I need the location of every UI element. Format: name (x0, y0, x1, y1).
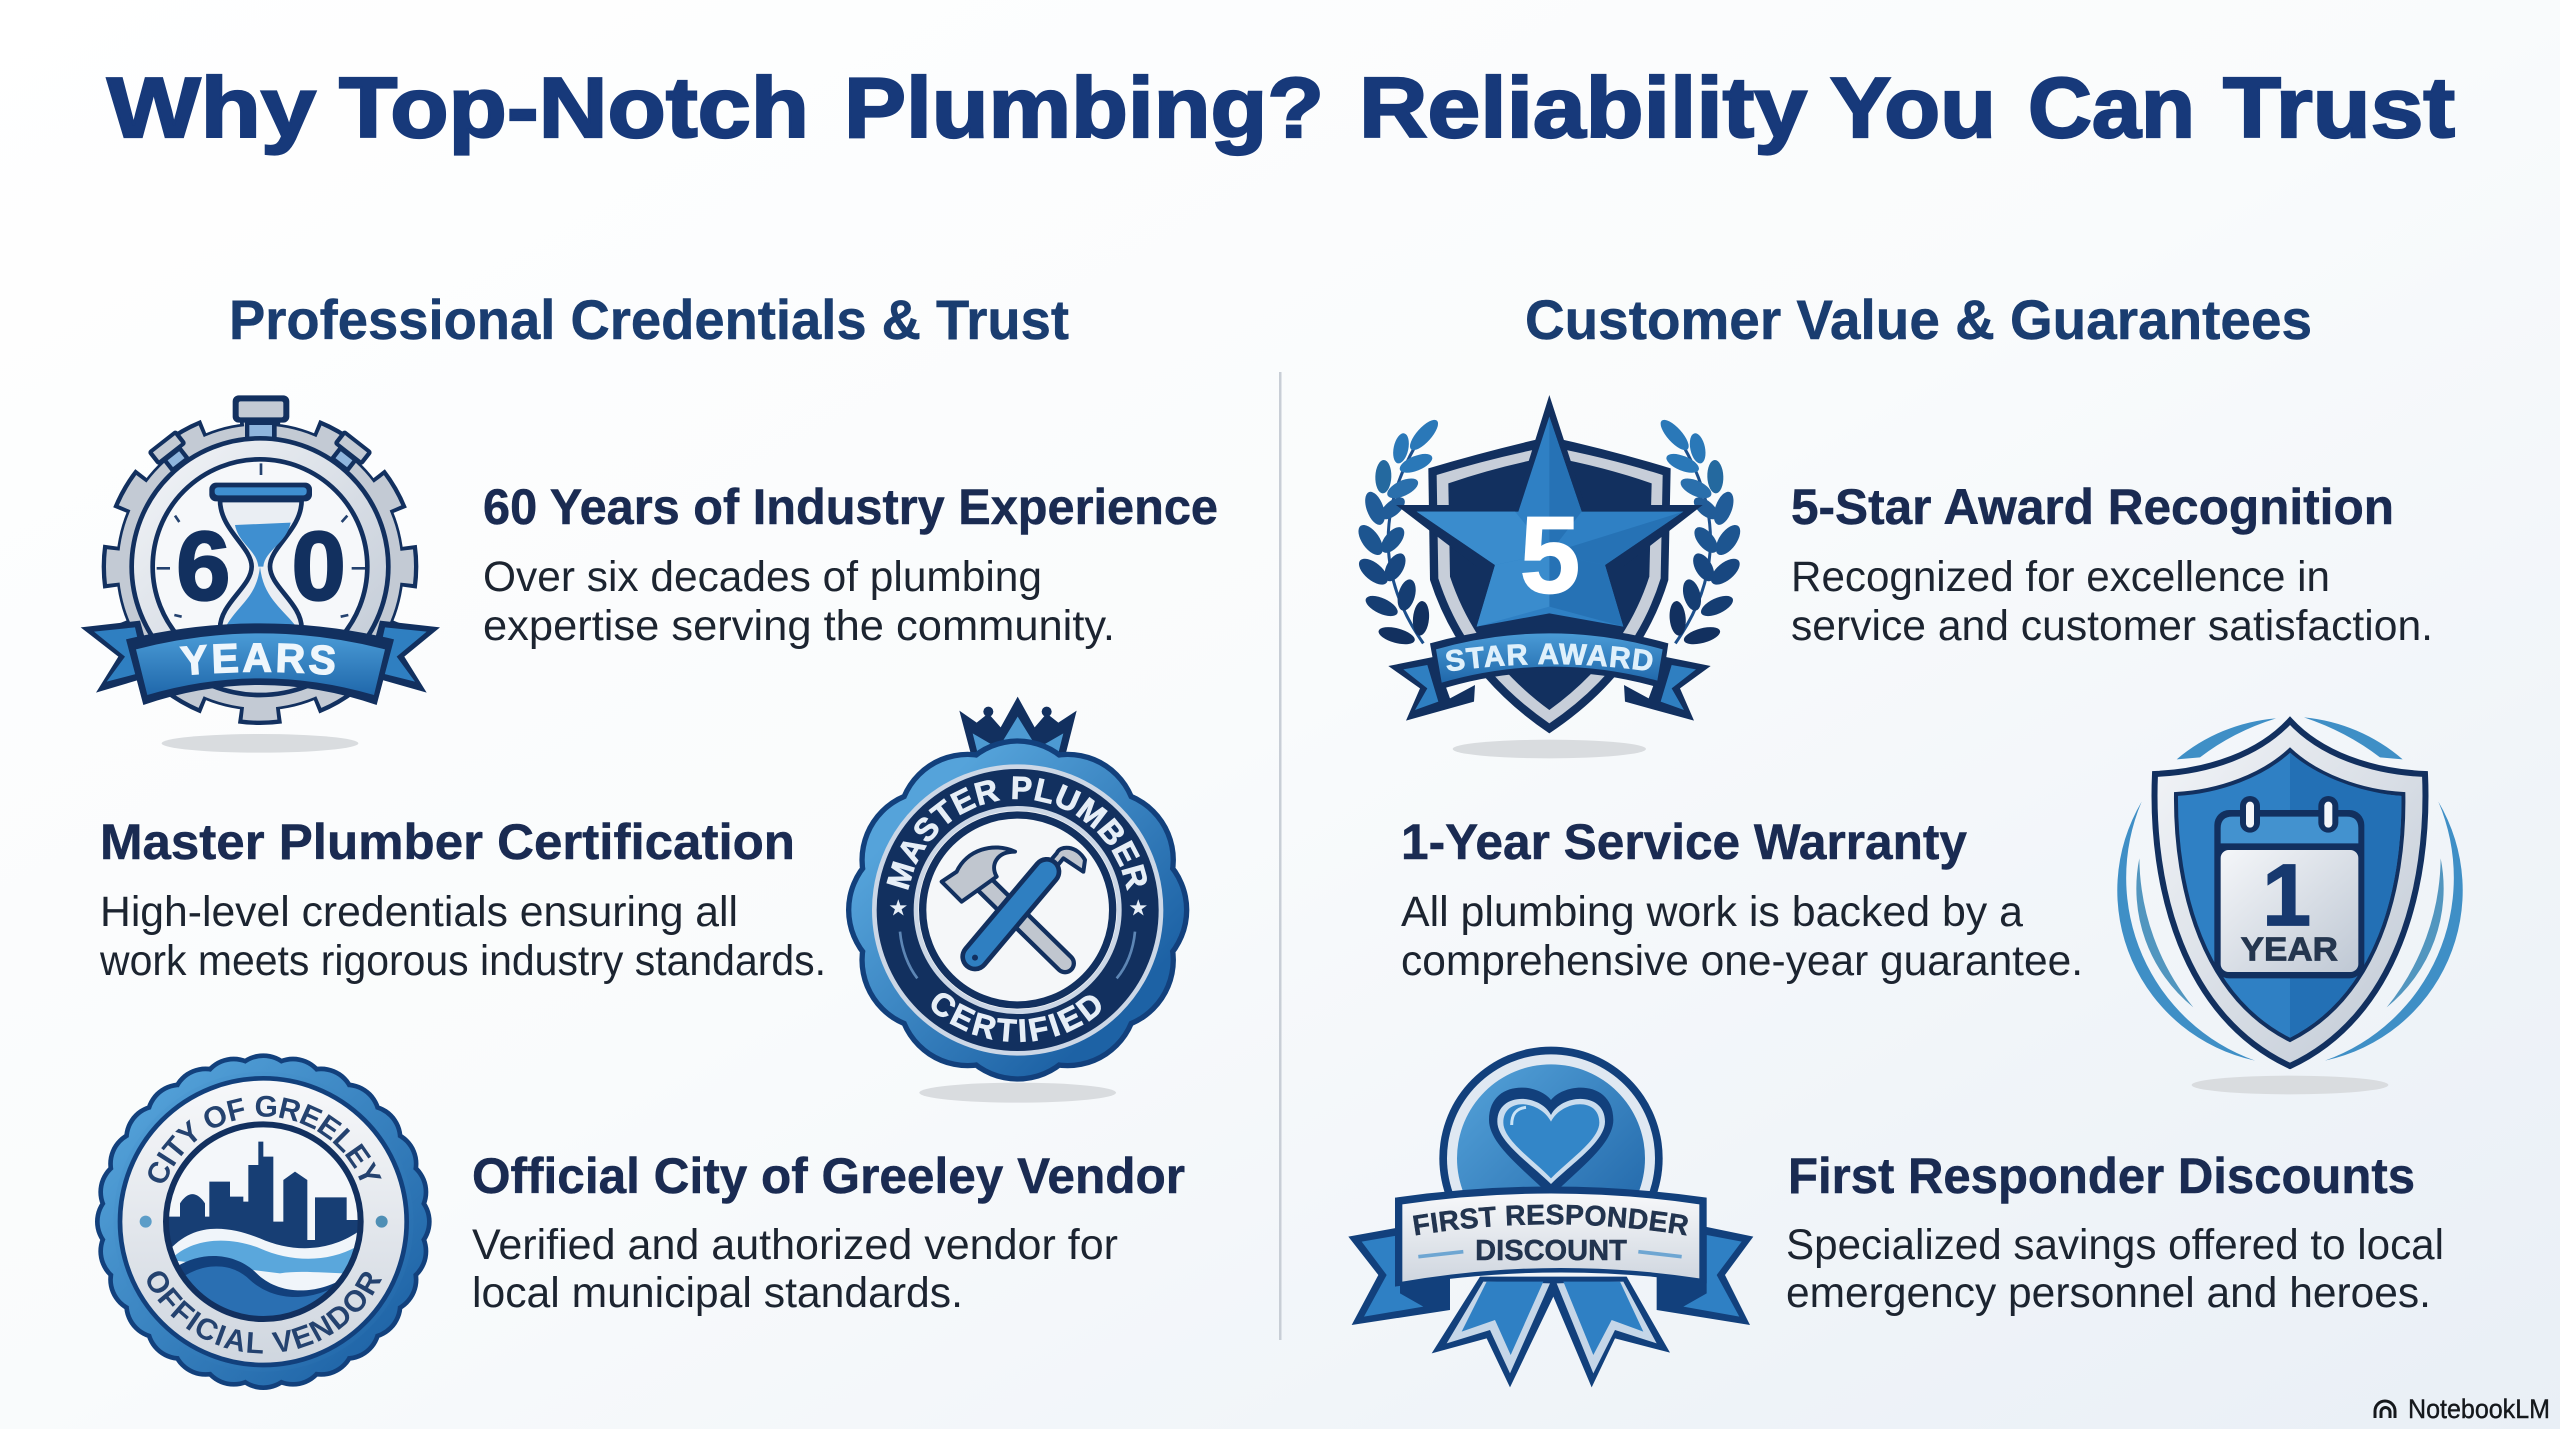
item text: 60 years (483, 479, 1218, 650)
seal text: ★ (891, 898, 907, 917)
seal text: OFFICIAL VENDOR (147, 1271, 382, 1354)
panel: customer value (1348, 288, 2463, 1388)
seal text: CITY OF GREELEY (148, 1096, 382, 1183)
icon: 60 years badge (80, 395, 440, 753)
ribbon tails (1348, 1227, 1753, 1325)
ribbon: star award (1388, 632, 1710, 721)
seal text (147, 1096, 382, 1354)
NotebookLM watermark: NotebookLM (2408, 1394, 2550, 1424)
item text: 5-star: Recognized for excellence in (1791, 553, 2330, 601)
title: Why (107, 61, 316, 156)
icon: first responder discount ribbon (1348, 1046, 1754, 1388)
ribbon: years (80, 620, 440, 705)
title: You (1830, 61, 1996, 156)
item text: 5-star (1791, 479, 2433, 650)
title: Plumbing? (844, 61, 1324, 156)
dial number 60: 6 (176, 511, 230, 620)
icon: master plumber certified seal (846, 696, 1190, 1102)
heart (1489, 1088, 1613, 1197)
shield (2155, 721, 2425, 1066)
item text: discounts: Specialized savings offered to local (1786, 1221, 2444, 1269)
title: Trust (2223, 61, 2455, 156)
banner (1395, 1186, 1707, 1287)
item text: city vendor (472, 1148, 1185, 1317)
ribbon: years: YEARS (179, 643, 335, 675)
icon: 5 star award (1358, 395, 1740, 758)
panel: professional credentials (80, 288, 1218, 1390)
item text: master plumber: work meets rigorous industry standards. (99, 937, 826, 985)
item text: city vendor: Official City of Greeley Vendor (472, 1148, 1185, 1204)
banner: FIRST RESPONDER (1412, 1204, 1688, 1236)
seal text: CERTIFIED (932, 993, 1101, 1042)
title: Reliability (1359, 61, 1807, 156)
item text: discounts: emergency personnel and heroes. (1786, 1269, 2431, 1317)
ribbon: star award: STAR AWARD (1446, 643, 1653, 672)
item text: discounts (1786, 1148, 2444, 1317)
seal text: MASTER PLUMBER (886, 776, 1147, 891)
calendar: 1 (2262, 846, 2311, 944)
item text: warranty: All plumbing work is backed by a (1401, 888, 2023, 936)
dial number 60 (176, 511, 346, 620)
item text: warranty: comprehensive one-year guarantee. (1401, 937, 2083, 985)
item text: discounts: First Responder Discounts (1788, 1148, 2415, 1204)
hourglass (209, 483, 312, 628)
dial number 60: 0 (292, 511, 346, 620)
item text: 60 years: expertise serving the community. (483, 602, 1115, 650)
item text: master plumber: High-level credentials ensuring all (100, 888, 738, 936)
crown (959, 697, 1077, 763)
item text: 60 years: 60 Years of Industry Experience (483, 479, 1218, 535)
swoosh arcs (2117, 717, 2463, 1061)
heading: Professional Credentials & Trust: Professional Credentials & Trust (229, 288, 1069, 351)
seal text (886, 776, 1147, 1042)
calendar: YEAR (2241, 932, 2338, 969)
item text: city vendor: local municipal standards. (472, 1269, 963, 1317)
item text: master plumber: Master Plumber Certification (100, 814, 795, 870)
shield (1428, 437, 1671, 733)
item text: warranty: 1-Year Service Warranty (1401, 814, 1967, 870)
skyline and river (169, 1142, 358, 1316)
title: Can (2028, 61, 2195, 156)
item text: master plumber (99, 814, 826, 985)
calendar (2214, 796, 2364, 978)
banner: DISCOUNT (1475, 1235, 1627, 1267)
title: Top-Notch (339, 61, 809, 156)
star (1396, 395, 1703, 630)
item text: 5-star: 5-Star Award Recognition (1791, 479, 2394, 535)
icon: 1 year warranty shield (2117, 717, 2463, 1094)
stopwatch crown (147, 395, 373, 476)
item text: 60 years: Over six decades of plumbing (483, 553, 1042, 601)
heading: Customer Value & Guarantees: Customer Value & Guarantees (1525, 288, 2312, 351)
item text: warranty (1401, 814, 2083, 985)
title (107, 61, 2455, 156)
laurel wreath (1354, 416, 1745, 648)
hammer and wrench (942, 847, 1085, 963)
item text: city vendor: Verified and authorized vendor for (472, 1221, 1118, 1269)
item text: 5-star: service and customer satisfaction. (1791, 602, 2433, 650)
star: 5 (1520, 495, 1580, 616)
ribbon strips (1432, 1277, 1670, 1387)
icon: city of greeley seal (95, 1053, 432, 1390)
seal text: ★ (1131, 898, 1147, 917)
